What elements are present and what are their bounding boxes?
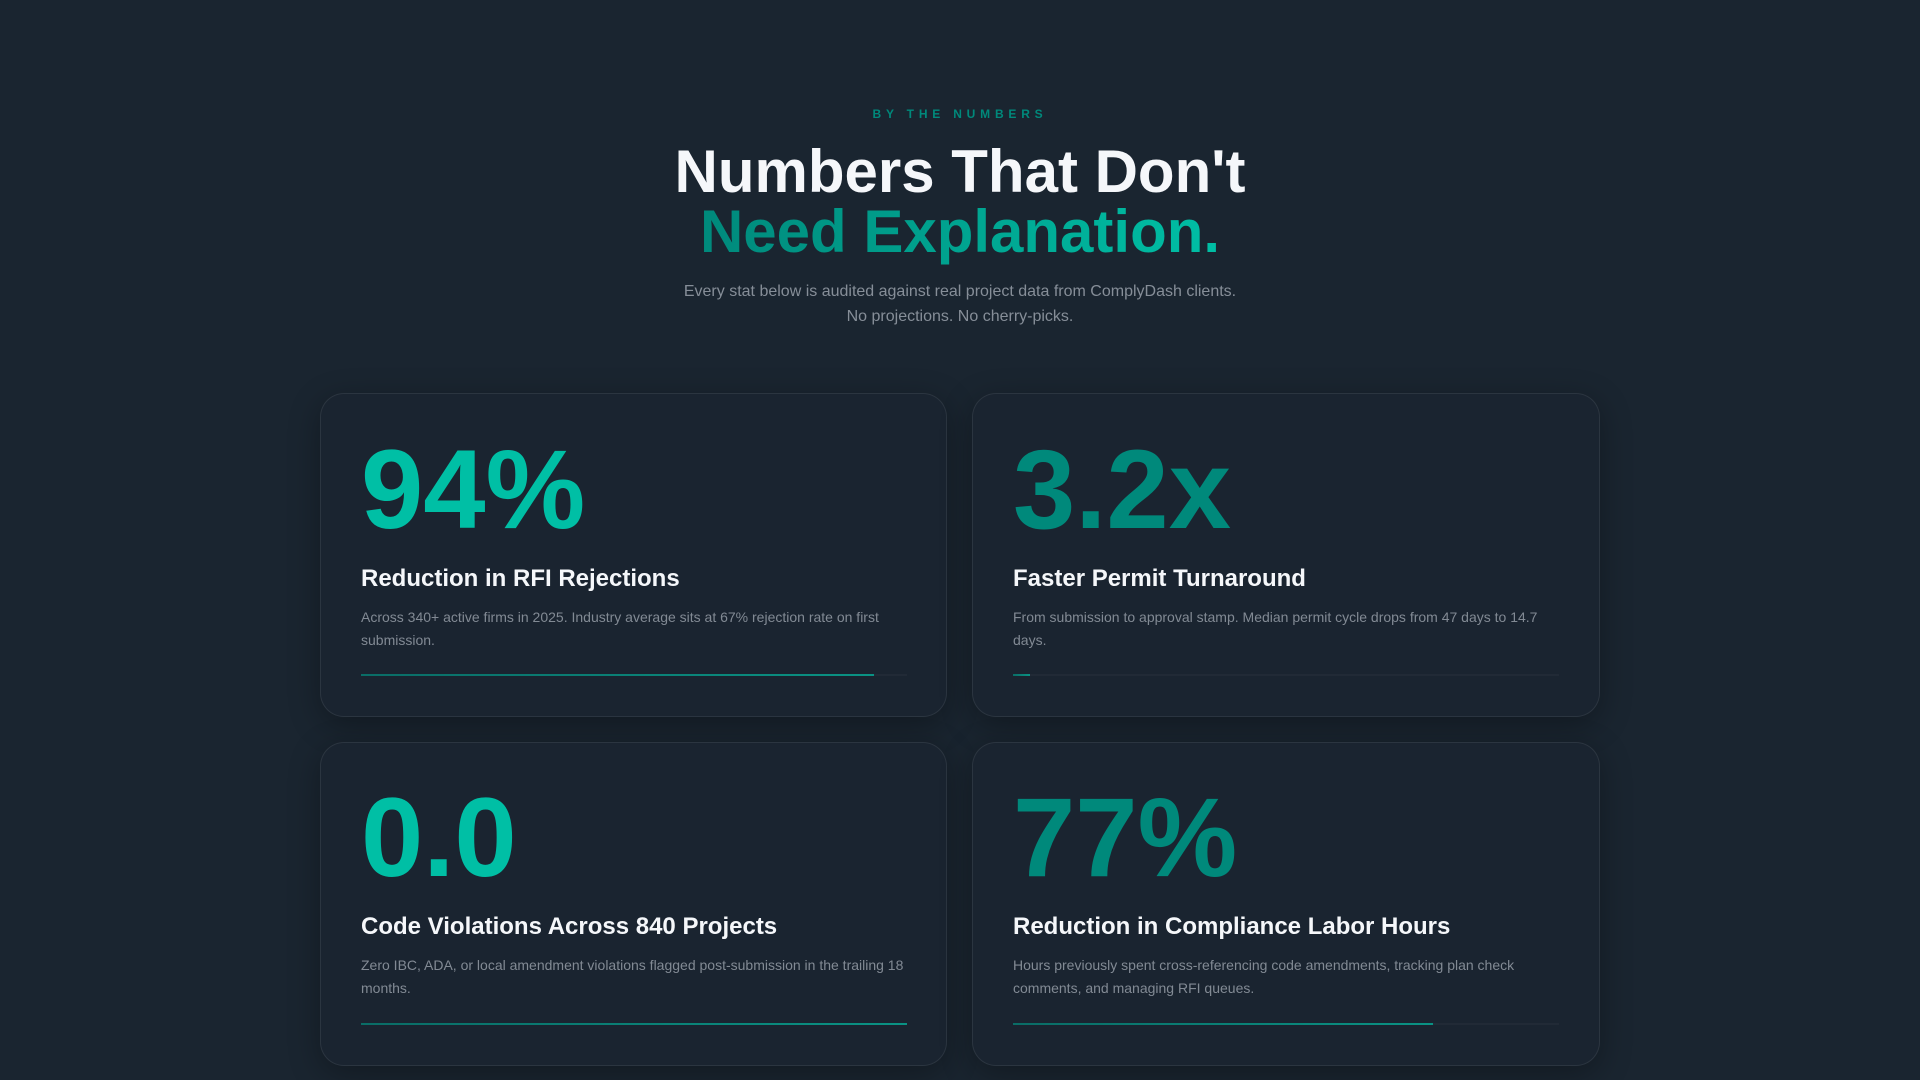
stat description: From submission to approval stamp. Median permit cycle drops from 47 days to 14.7 days. — [1013, 609, 1537, 648]
stat description: Hours previously spent cross-referencing code amendments, tracking plan check comments, and managing RFI queues. — [1013, 957, 1514, 996]
progress bar: 94% — [361, 674, 907, 676]
panel: code violations stat — [320, 742, 947, 1066]
stat value: 0.0: 0.0 — [361, 775, 517, 900]
progress bar: 100% — [361, 1023, 907, 1025]
panel: RFI rejections stat — [320, 393, 947, 717]
panel: permit turnaround stat — [972, 393, 1600, 717]
eyebrow label: BY THE NUMBERS — [872, 107, 1048, 121]
stat value: 3.2x: 3.2x — [1013, 427, 1231, 552]
panel: compliance labor stat — [972, 742, 1600, 1066]
stat value: 94%: 94% — [361, 427, 585, 552]
title: Need Explanation. — [700, 198, 1220, 265]
stat heading: Code Violations Across 840 Projects — [361, 913, 777, 940]
progress bar: 3.2% — [1013, 674, 1559, 676]
title: Numbers That Don't — [675, 138, 1245, 205]
stat heading: Reduction in Compliance Labor Hours — [1013, 913, 1450, 940]
progress bar: 77% — [1013, 1023, 1559, 1025]
stat value: 77%: 77% — [1013, 775, 1237, 900]
subtitle: No projections. No cherry-picks. — [847, 308, 1073, 325]
title — [675, 138, 1245, 265]
stat heading: Reduction in RFI Rejections — [361, 565, 680, 592]
subtitle: Every stat below is audited against real project data from ComplyDash clients. — [684, 283, 1236, 300]
stat description: Across 340+ active firms in 2025. Industry average sits at 67% rejection rate on first submission. — [361, 609, 879, 648]
subtitle — [684, 283, 1236, 325]
stat description: Zero IBC, ADA, or local amendment violations flagged post-submission in the trailing 18 months. — [361, 957, 903, 996]
stat heading: Faster Permit Turnaround — [1013, 565, 1306, 592]
